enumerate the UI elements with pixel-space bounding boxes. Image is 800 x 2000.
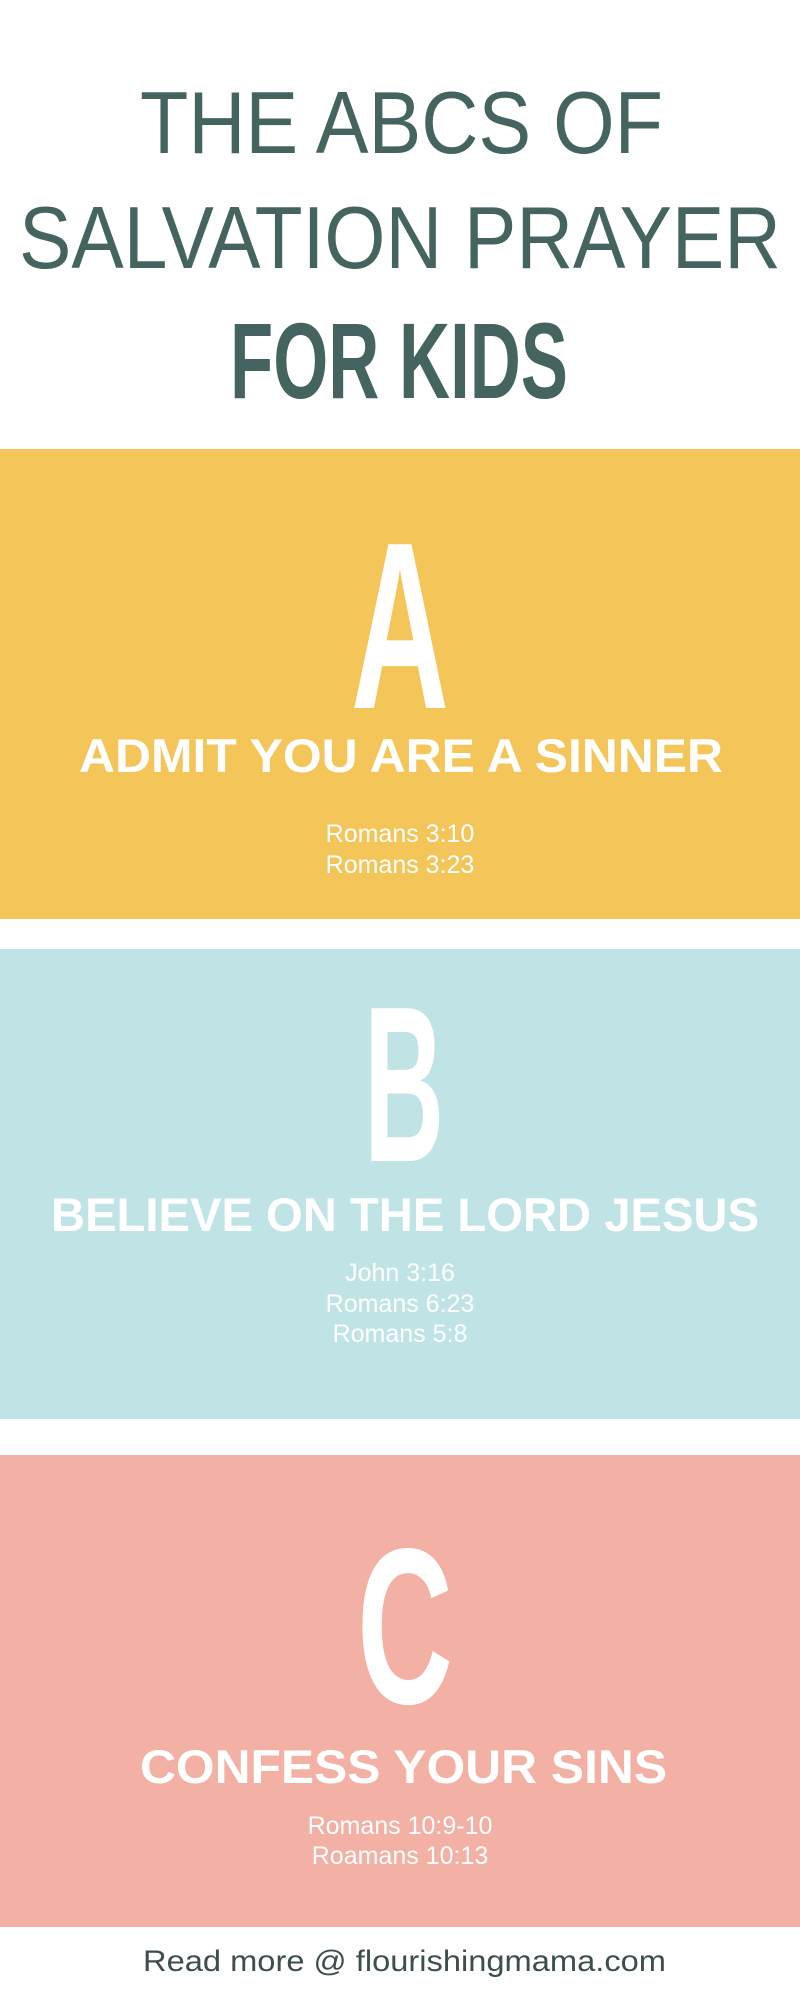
heading: believe: BELIEVE ON THE LORD JESUS (51, 1188, 759, 1241)
panel: C confess (0, 1455, 800, 1927)
panel: B believe (0, 949, 800, 1419)
letter A: A (351, 494, 449, 759)
verses A: Romans 3:10 (326, 820, 474, 848)
title: THE ABCS OF (140, 73, 663, 172)
title: FOR KIDS (230, 300, 568, 421)
verses A (326, 820, 474, 879)
heading: confess: CONFESS YOUR SINS (140, 1740, 667, 1793)
verses C (308, 1812, 492, 1870)
verses B: Romans 5:8 (333, 1320, 467, 1348)
footer: Read more @ flourishingmama.com (143, 1945, 666, 1978)
heading: admit: ADMIT YOU ARE A SINNER (79, 729, 723, 782)
verses C: Romans 10:9-10 (308, 1812, 492, 1840)
verses C: Roamans 10:13 (312, 1842, 488, 1870)
panel: B believe: B (364, 961, 444, 1209)
verses B: John 3:16 (345, 1259, 455, 1287)
panel: A admit (0, 449, 800, 919)
verses A: Romans 3:23 (326, 851, 474, 879)
letter C: C (357, 1503, 453, 1751)
title (19, 73, 781, 421)
verses B: Romans 6:23 (326, 1290, 474, 1318)
verses B (326, 1259, 474, 1348)
